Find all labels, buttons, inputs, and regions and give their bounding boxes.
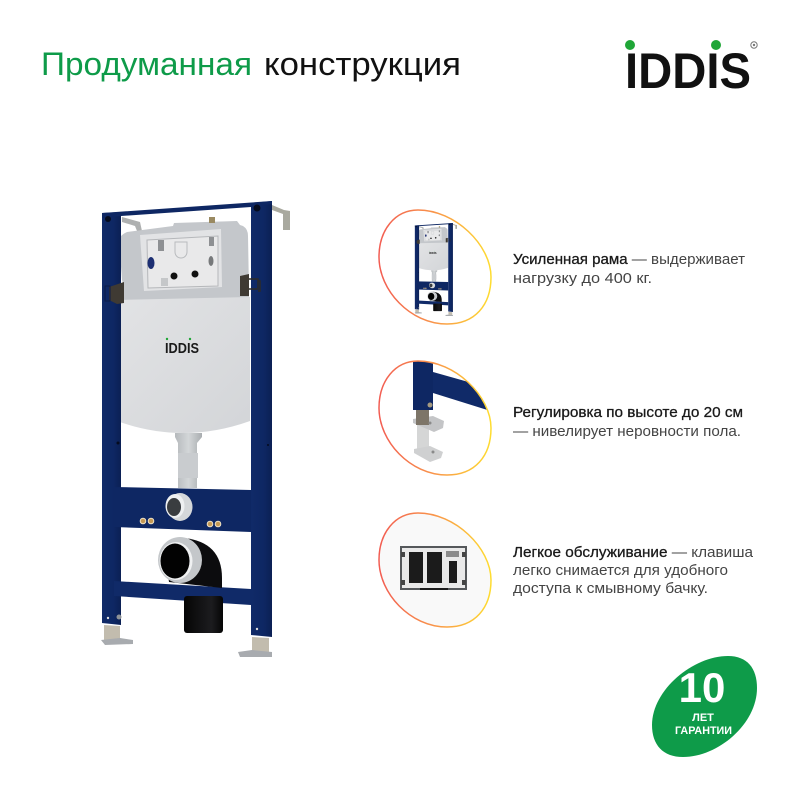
warranty badge: ЛЕТ	[692, 712, 714, 724]
warranty badge	[652, 656, 757, 757]
title	[41, 46, 461, 82]
thumbnail: adjustable foot	[413, 362, 487, 462]
drain pipe	[175, 433, 202, 488]
feature 2: height adjustment	[379, 355, 743, 475]
warranty badge: ГАРАНТИИ	[675, 725, 732, 737]
logo: IDDIS: IDDIS	[625, 43, 751, 99]
feature text 2: Регулировка по высоте до 20 см	[513, 404, 743, 421]
brass fitting	[209, 217, 215, 223]
side clips	[105, 274, 260, 304]
title: Продуманная	[41, 46, 252, 82]
feature 3: easy maintenance	[378, 512, 753, 628]
feature text 2	[513, 404, 743, 440]
warranty badge: 10	[679, 664, 725, 711]
thumbnail ring 1	[379, 210, 491, 324]
black outlet elbow	[158, 537, 223, 633]
brackets	[122, 205, 290, 231]
feature text 1: нагрузку до 400 кг.	[513, 270, 652, 287]
feature text 3: легко снимается для удобного	[513, 562, 728, 579]
tank upper body	[117, 221, 249, 304]
thumbnail: flush plate	[400, 546, 467, 590]
service opening	[140, 229, 222, 291]
feature 1: reinforced frame	[379, 210, 745, 324]
feature text 1	[513, 251, 745, 287]
thumbnail ring 2	[379, 361, 491, 475]
thumbnail ring 3	[379, 513, 491, 627]
brass screws	[140, 518, 221, 527]
title: конструкция	[264, 46, 461, 82]
feature text 2: — нивелирует неровности пола.	[513, 423, 741, 440]
tank logo: IDDIS	[165, 340, 199, 357]
tank lower body	[117, 297, 250, 433]
thumbnail: full frame	[415, 223, 457, 316]
frame posts and rails	[102, 201, 272, 637]
feature text 3: доступа к смывному бачку.	[513, 580, 708, 597]
feature text 3	[513, 544, 754, 597]
adjustable feet	[101, 625, 272, 657]
feature text 3: Легкое обслуживание — клавиша	[513, 544, 754, 561]
feature text 1: Усиленная рама — выдерживает	[513, 251, 745, 268]
flush connector	[166, 493, 192, 521]
installation frame illustration	[101, 201, 290, 657]
